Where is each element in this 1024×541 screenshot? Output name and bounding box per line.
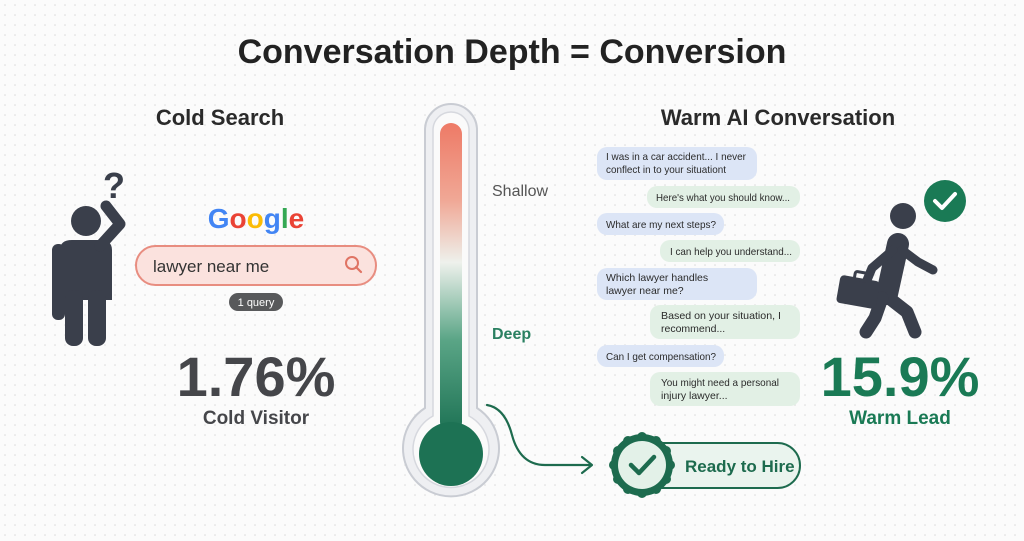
chat bubbles: Based on your situation, I bbox=[661, 310, 781, 322]
chat bubbles: Can I get compensation? bbox=[606, 351, 716, 363]
chat bubbles: What are my next steps? bbox=[606, 219, 716, 231]
thermometer bbox=[403, 104, 499, 496]
icon: check circle bbox=[924, 180, 966, 222]
heading: cold search: Cold Search bbox=[156, 105, 284, 130]
label: deep: Deep bbox=[492, 326, 531, 343]
chat bubbles: Here's what you should know... bbox=[656, 192, 790, 204]
stat: cold: Cold Visitor bbox=[203, 408, 310, 429]
heading: warm AI conversation: Warm AI Conversation bbox=[661, 105, 895, 130]
icon: walking person with briefcase bbox=[836, 203, 933, 332]
icon: confused person: ? bbox=[103, 165, 125, 206]
chat bubbles: Which lawyer handles bbox=[606, 272, 708, 284]
Google logo: Google bbox=[208, 203, 304, 234]
arrow bbox=[487, 405, 592, 473]
stat: warm: Warm Lead bbox=[849, 408, 951, 429]
query pill: 1 query bbox=[238, 297, 275, 309]
chat bubbles: conflect in to your situationt bbox=[606, 164, 726, 176]
ready to hire badge: Ready to Hire bbox=[685, 457, 795, 476]
ready to hire badge bbox=[609, 432, 800, 498]
chat bubbles: recommend... bbox=[661, 323, 725, 335]
stat: warm: 15.9% bbox=[821, 345, 979, 408]
chat bubbles: injury lawyer... bbox=[661, 390, 728, 402]
search bar bbox=[136, 246, 376, 285]
icon: confused person bbox=[52, 165, 125, 346]
chat bubbles: I was in a car accident... I never bbox=[606, 151, 746, 163]
chat bubbles bbox=[597, 147, 800, 406]
query pill bbox=[229, 293, 283, 311]
chat bubbles: You might need a personal bbox=[661, 377, 779, 389]
stat: cold: 1.76% bbox=[177, 345, 335, 408]
title: Conversation Depth = Conversion bbox=[238, 33, 786, 71]
label: shallow: Shallow bbox=[492, 183, 548, 200]
chat bubbles: I can help you understand... bbox=[670, 246, 792, 258]
search bar: lawyer near me bbox=[153, 257, 269, 276]
chat bubbles: lawyer near me? bbox=[606, 285, 684, 297]
